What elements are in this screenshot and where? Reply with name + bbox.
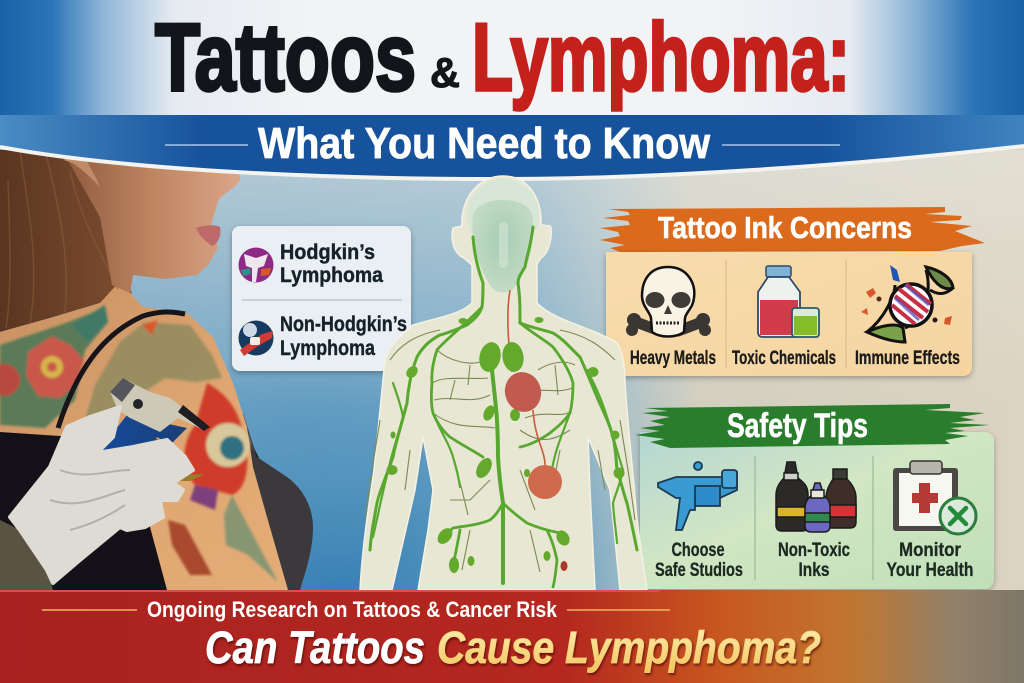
black strap: [58, 312, 185, 428]
icon: skull and crossbones: [626, 267, 711, 336]
label: monitor your health: Monitor: [899, 539, 961, 561]
icon: DNA strand: [861, 265, 953, 342]
label: choose safe studios: Choose: [672, 539, 725, 561]
green lymph nodes: [386, 317, 624, 573]
Non-Hodgkin's label: Non-Hodgkin’s: [280, 312, 407, 336]
gloved hand: [10, 407, 193, 583]
red lymph nodes: [500, 368, 568, 571]
forearm tattoo sleeve: [0, 520, 53, 590]
panel: safety tips: Safe Studios: [655, 559, 743, 581]
title: Tattoos: [155, 4, 416, 111]
title: Lymphoma:: [472, 4, 850, 111]
green lymph vessels: [370, 227, 637, 587]
face mask: [472, 200, 533, 292]
banner question: Cause Lympphoma?: [437, 622, 821, 673]
label: heavy metals: Heavy Metals: [630, 348, 716, 369]
tattoo back flowers: [0, 305, 278, 582]
label: immune effects: Immune Effects: [855, 348, 960, 369]
icon: chemical bottle and beaker: [758, 266, 819, 337]
Hodgkin's label: Hodgkin’s: [280, 240, 375, 264]
panel: safety tips: Inks: [798, 559, 830, 581]
body diagram: lymphatic system: [360, 176, 647, 590]
heading: tattoo ink concerns: Tattoo Ink Concerns: [658, 210, 912, 245]
panel: lymphoma types: Lymphoma: [280, 336, 376, 360]
banner question: [205, 622, 821, 673]
body silhouette: [360, 176, 647, 590]
dark top and body: [0, 420, 290, 590]
icon: ink bottles: [776, 462, 856, 532]
subtitle: What You Need to Know: [258, 119, 711, 168]
heading: tattoo ink concerns: [600, 207, 985, 252]
panel: safety tips: [635, 404, 994, 589]
subtitle band: [0, 115, 1024, 179]
panel: lymphoma types: [232, 226, 411, 371]
panel: tattoo ink concerns: [600, 207, 985, 376]
icon: Non-Hodgkin's lymphoma: [238, 320, 274, 356]
hair: [0, 150, 132, 332]
bottom banner: [0, 590, 1024, 683]
fine vessels: [365, 330, 635, 572]
hair strands: [6, 150, 118, 328]
neck and shoulder skin: [0, 270, 288, 590]
header banner: [0, 0, 1024, 120]
icon: health clipboard: [893, 461, 976, 534]
heading: safety tips: Safety Tips: [727, 407, 868, 445]
title: &: [430, 49, 460, 96]
banner question: Can Tattoos: [205, 622, 425, 673]
panel: lymphoma types: Lymphoma: [280, 263, 384, 287]
label: non-toxic inks: Non-Toxic: [778, 539, 850, 561]
red lymph vessels: [508, 290, 545, 465]
icon: tattoo gun: [658, 462, 737, 530]
tattoo machine: [98, 378, 210, 517]
panel: safety tips: Your Health: [886, 559, 974, 581]
icon: Hodgkin's lymphoma: [238, 248, 274, 282]
title: [155, 4, 850, 111]
panel: woman with tattoo: [0, 150, 313, 590]
face: [62, 150, 240, 293]
tattoo arm flower: [184, 383, 247, 495]
banner subheading: Ongoing Research on Tattoos & Cancer Risk: [147, 597, 558, 622]
head tint: [467, 179, 539, 251]
label: toxic chemicals: Toxic Chemicals: [732, 348, 836, 369]
heading: safety tips: [635, 404, 990, 448]
